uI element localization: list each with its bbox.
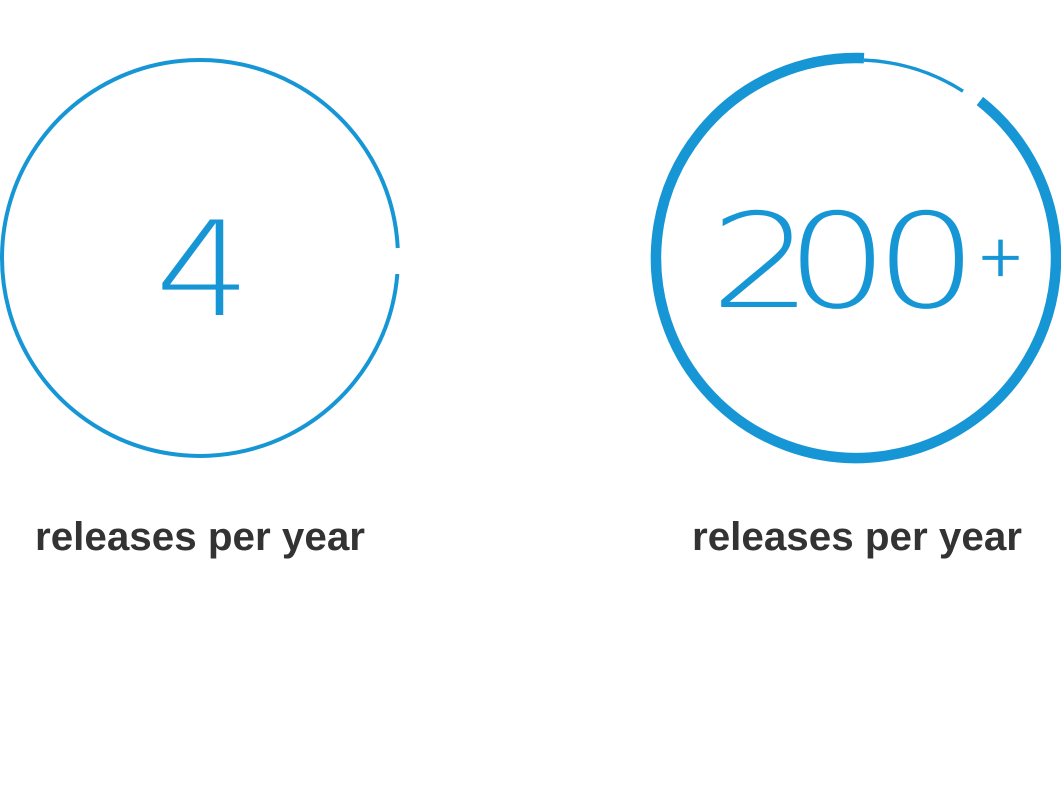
label: releases per year: releases per year [35, 515, 365, 559]
panel: right stat, 200+ releases per year [656, 58, 1056, 559]
number: plus sign: + [978, 224, 1024, 288]
ring: thin circle with gap [2, 60, 398, 456]
ring: thin arc segment [864, 60, 963, 91]
number: 4: 4 [155, 194, 251, 347]
number: 200: 200 [710, 185, 978, 338]
label: releases per year: releases per year [692, 515, 1022, 559]
panel: left stat, 4 releases per year [2, 60, 398, 559]
ring: thick arc [656, 58, 1056, 458]
